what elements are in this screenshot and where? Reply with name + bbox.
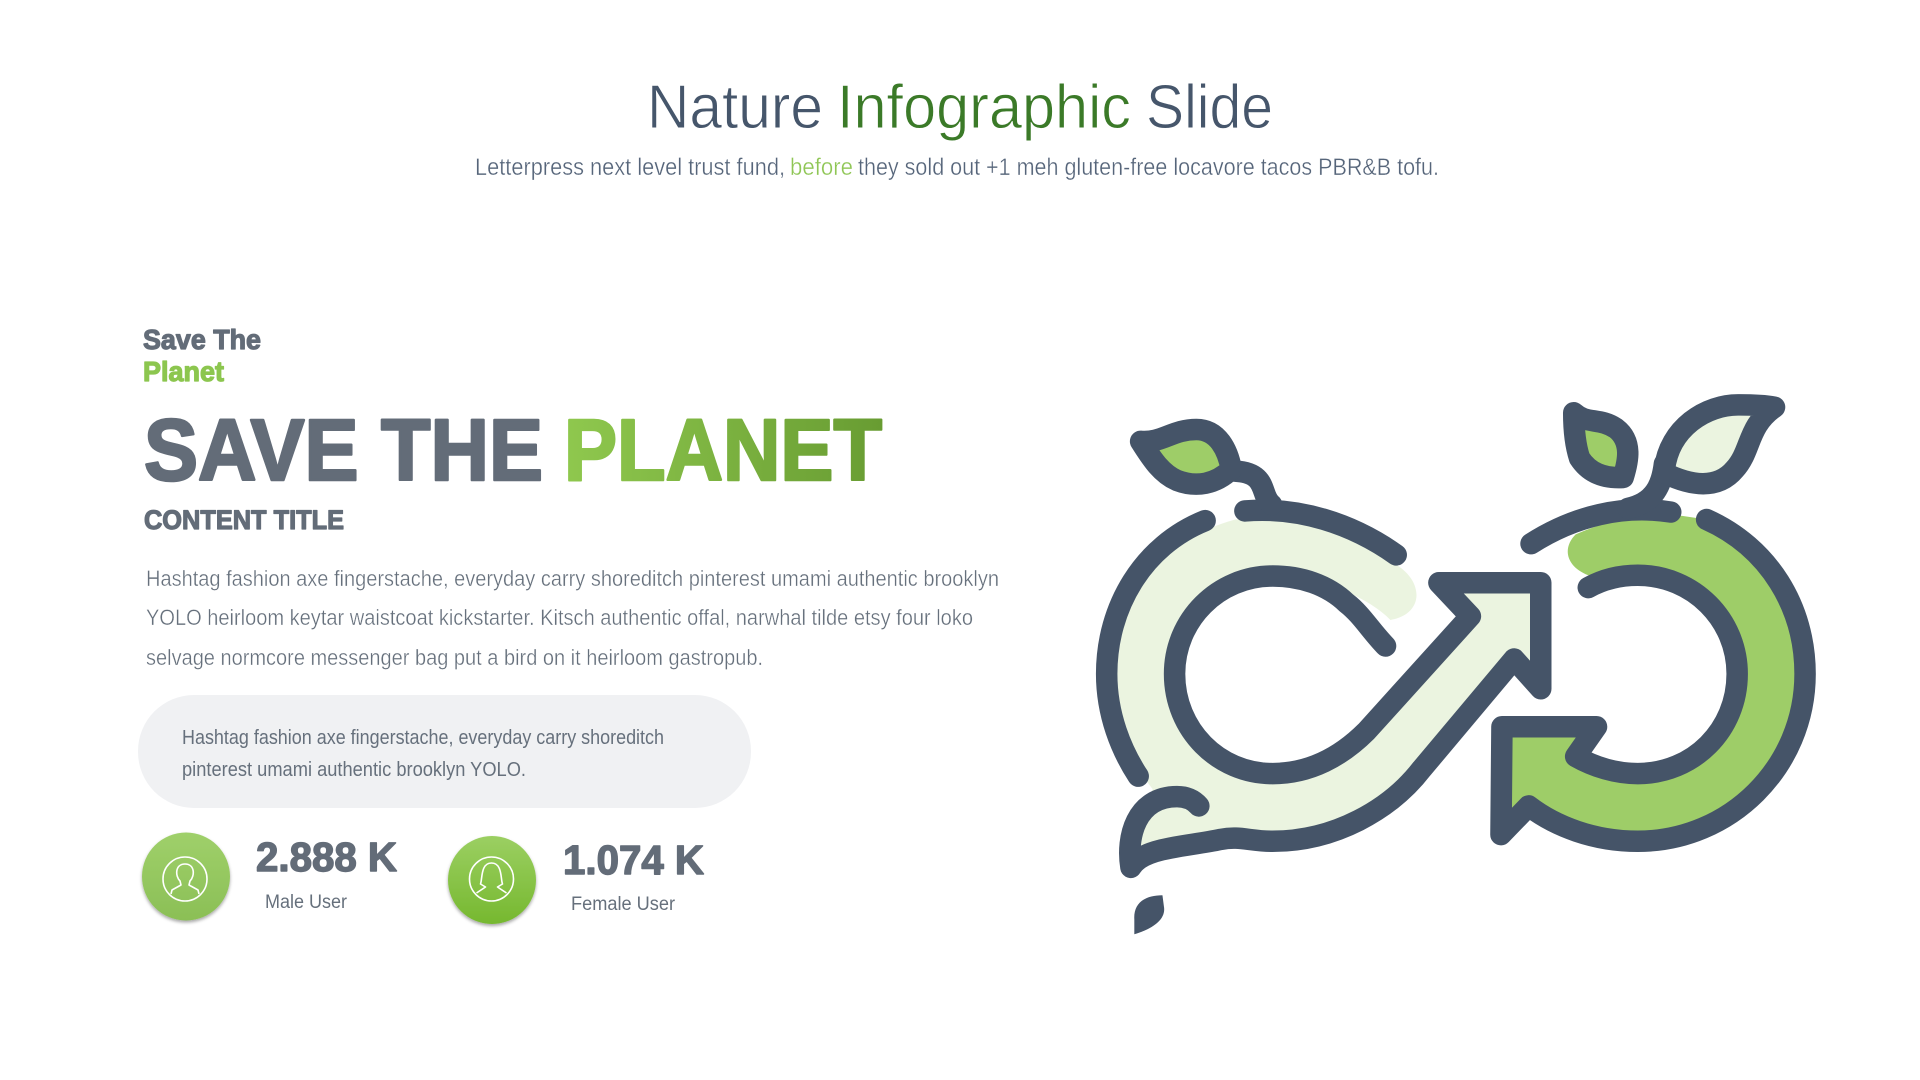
small heading: Save The Planet: Save The [143,324,261,355]
title: Slide [1146,73,1273,142]
main heading: SAVE THE PLANET [144,402,882,499]
content title: CONTENT TITLE [144,505,344,535]
left stem [1235,471,1272,505]
right small leaf [1574,413,1628,478]
title: Infographic [837,73,1131,142]
left leaf [1141,429,1231,484]
body paragraph: YOLO heirloom keytar waistcoat kickstarter. Kitsch authentic offal, narwhal tilde etsy four loko [146,605,973,630]
falling leaf [1134,895,1164,934]
callout pill [138,695,751,808]
stat: female user [448,836,704,924]
right big leaf [1664,405,1775,484]
callout pill: Hashtag fashion axe fingerstache, everyday carry shoreditch [182,727,664,749]
right arrow outline [1501,520,1805,841]
left outer arc [1107,521,1205,776]
subtitle: before [790,154,853,181]
left top arc [1245,510,1396,555]
stat: female user: 1.074 K [563,837,704,883]
callout pill: pinterest umami authentic brooklyn YOLO. [182,759,526,781]
small heading: Save The Planet: Planet [143,356,224,387]
left band fill [1107,519,1541,867]
stat: male user [142,832,397,920]
title [647,73,1273,142]
stat: male user: 2.888 K [256,834,397,880]
body paragraph: Hashtag fashion axe fingerstache, everyday carry shoreditch pinterest umami authentic brooklyn [146,566,999,591]
left arrow outline [1130,576,1541,867]
body paragraph: selvage normcore messenger bag put a bird on it heirloom gastropub. [146,645,763,670]
stat: male user: Male User [265,892,348,913]
right band fill [1501,515,1805,841]
right stem [1628,464,1664,508]
subtitle: Letterpress next level trust fund, [475,154,785,181]
right top arc [1531,510,1671,544]
subtitle [475,154,1439,181]
main heading: SAVE THE PLANET: SAVE THE [144,402,543,499]
body paragraph [146,566,999,670]
stat: female user: Female User [571,894,676,915]
icon: female user [448,836,536,924]
subtitle: they sold out +1 meh gluten-free locavore tacos PBR&B tofu. [858,154,1439,181]
icon: male user [142,832,230,920]
title: Nature [647,73,823,142]
main heading: SAVE THE PLANET: PLANET [564,402,882,499]
small heading: Save The Planet [143,324,261,387]
illustration: infinity recycle arrows with leaves [1107,405,1805,934]
